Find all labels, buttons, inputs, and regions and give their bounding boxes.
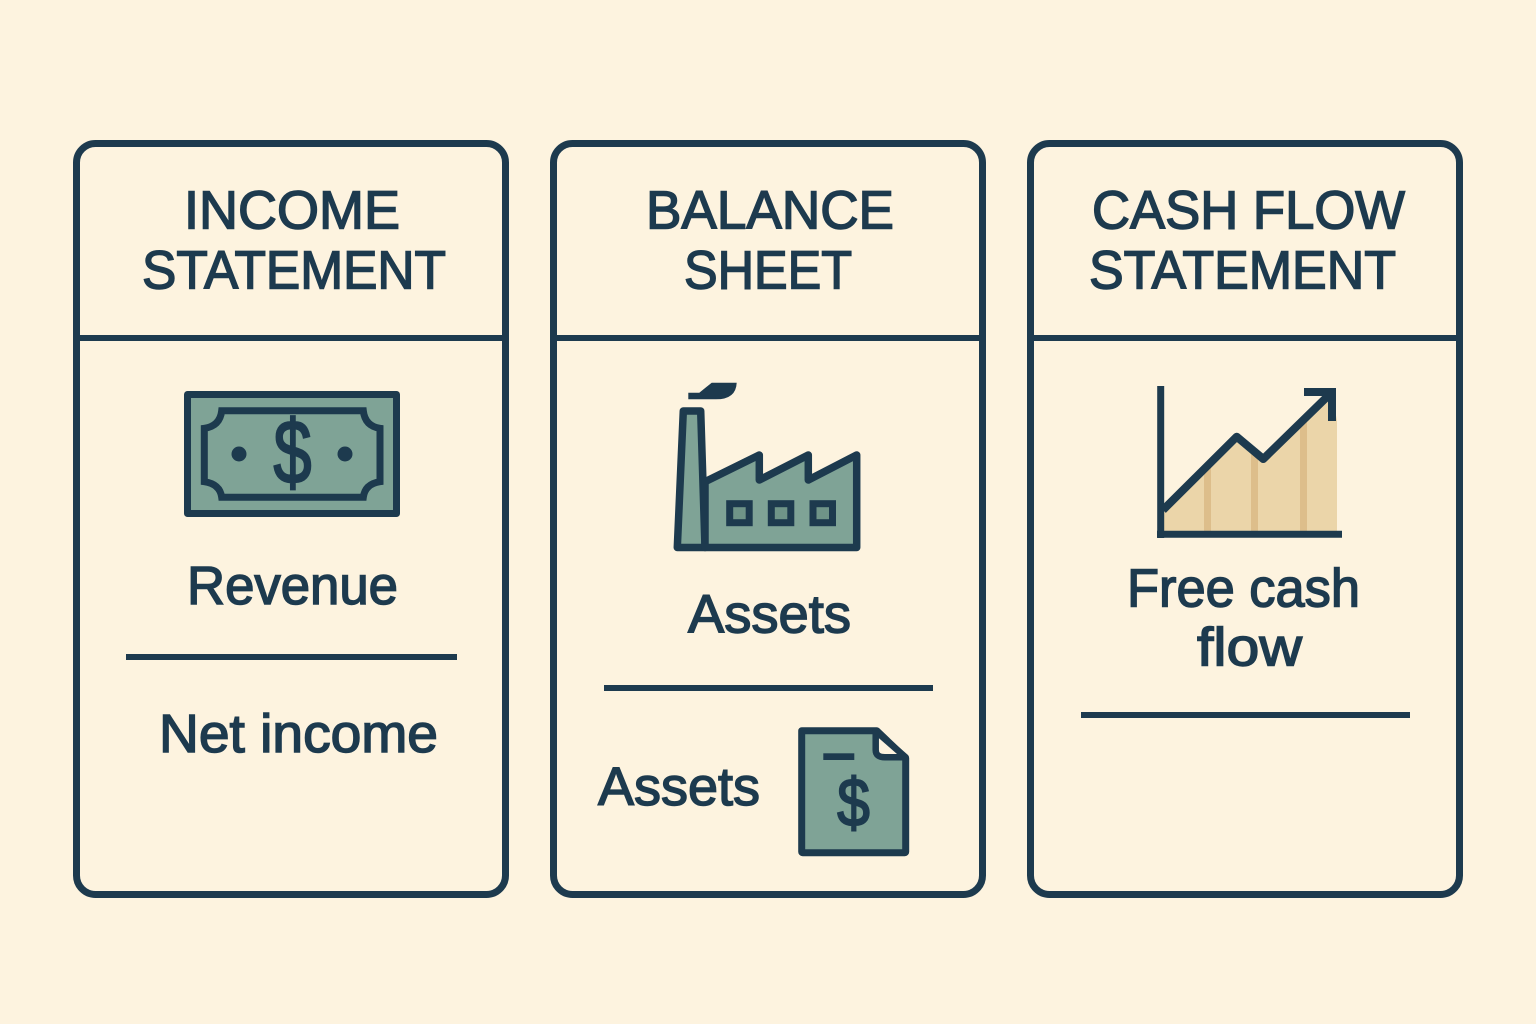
- heading: income statement: STATEMENT: [142, 240, 446, 300]
- icon: growth chart: [1157, 386, 1342, 538]
- label: revenue: Revenue: [187, 556, 398, 616]
- panel frame: [554, 144, 982, 894]
- heading: cash flow statement: STATEMENT: [1089, 240, 1396, 300]
- panel frame: [1030, 144, 1460, 894]
- heading: balance sheet: SHEET: [684, 240, 852, 300]
- heading: cash flow statement: [1089, 180, 1405, 300]
- label: free cash flow: flow: [1197, 618, 1303, 678]
- panel: cash flow statement: [1030, 144, 1460, 894]
- icon: factory: [677, 383, 857, 548]
- label: net income: Net income: [159, 704, 438, 764]
- heading: balance sheet: BALANCE: [646, 180, 894, 240]
- panel frame: [76, 144, 506, 894]
- panel: balance sheet: [553, 144, 983, 894]
- heading: balance sheet: [646, 180, 894, 300]
- label: assets lower: Assets: [598, 757, 760, 817]
- icon: banknote: $: [273, 402, 312, 502]
- icon: document with dollar: $: [837, 766, 870, 841]
- label: free cash flow: Free cash: [1127, 558, 1360, 618]
- icon: banknote: [188, 394, 396, 514]
- heading: cash flow statement: CASH FLOW: [1092, 180, 1405, 240]
- heading: income statement: [142, 180, 446, 300]
- heading: income statement: INCOME: [184, 180, 400, 240]
- panel: income statement: [76, 144, 506, 894]
- label: free cash flow: [1127, 558, 1360, 678]
- label: assets: Assets: [688, 584, 851, 644]
- icon: document with dollar: [802, 731, 906, 853]
